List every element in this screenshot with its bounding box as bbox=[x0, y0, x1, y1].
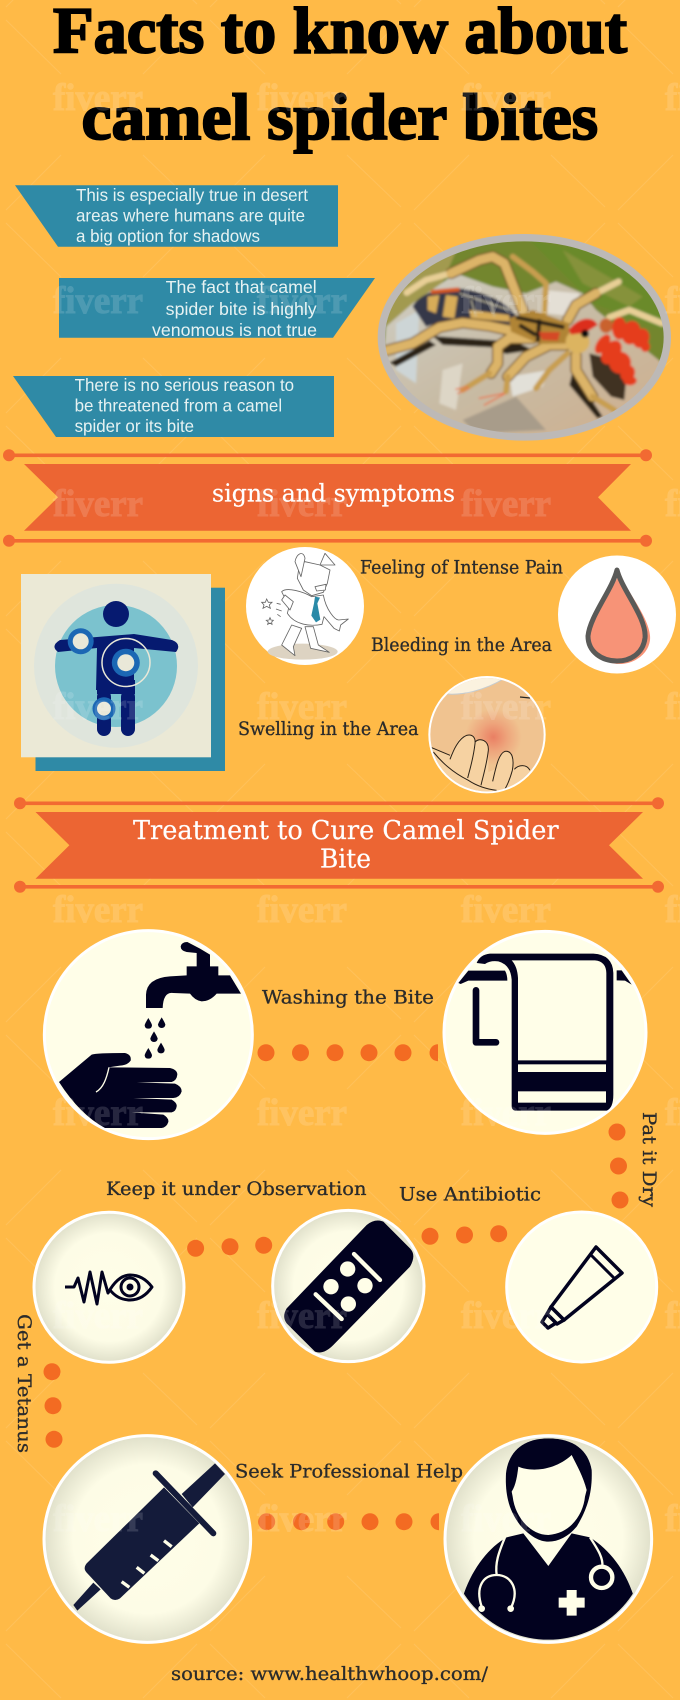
watermarks: fiverr bbox=[53, 483, 143, 525]
callout: no serious reason: There is no serious reason to bbox=[75, 375, 294, 395]
watermarks: fiverr bbox=[461, 280, 551, 322]
label: seek professional help: Seek Professional Help bbox=[235, 1462, 463, 1483]
watermarks bbox=[53, 77, 680, 1540]
label: swelling: Swelling in the Area bbox=[238, 719, 418, 740]
connector dots: towel to tube bbox=[608, 1124, 628, 1208]
connector dots: wash to towel bbox=[258, 1044, 438, 1061]
watermarks: fiverr bbox=[53, 1498, 143, 1540]
watermarks: fiverr bbox=[257, 280, 347, 322]
icon: man in pain bbox=[246, 547, 364, 665]
icon: doctor bbox=[445, 1436, 652, 1650]
icon: towel bbox=[444, 931, 646, 1133]
watermarks: fiverr bbox=[461, 686, 551, 728]
label: washing the bite: Washing the Bite bbox=[262, 987, 434, 1008]
watermarks: fiverr bbox=[257, 686, 347, 728]
callout: venom myth: The fact that camel bbox=[166, 277, 317, 297]
connector dots: bandage to tube bbox=[422, 1225, 507, 1245]
callout: no serious reason: spider or its bite bbox=[75, 416, 194, 436]
watermarks: fiverr bbox=[53, 1295, 143, 1337]
watermarks: fiverr bbox=[461, 1498, 551, 1540]
legs outline bbox=[386, 257, 596, 397]
watermarks: fiverr bbox=[257, 483, 347, 525]
banner: treatment bbox=[36, 812, 643, 879]
banner: signs and symptoms bbox=[24, 464, 631, 531]
label: use antibiotic: Use Antibiotic bbox=[399, 1185, 541, 1206]
label: get a tetanus: Get a Tetanus bbox=[13, 1314, 34, 1453]
connector dots: eye to syringe bbox=[44, 1363, 62, 1448]
chelicerae bbox=[592, 317, 652, 385]
title bbox=[53, 0, 627, 154]
watermarks: fiverr bbox=[461, 77, 551, 119]
divider line 1 bbox=[3, 449, 652, 461]
head bbox=[566, 330, 590, 353]
callout: desert shadows bbox=[15, 185, 338, 247]
watermarks: fiverr bbox=[461, 483, 551, 525]
watermarks: fiverr bbox=[53, 686, 143, 728]
divider line 4 bbox=[14, 881, 664, 893]
watermarks: fiverr bbox=[257, 77, 347, 119]
callout: no serious reason bbox=[13, 375, 334, 437]
watermarks: fiverr bbox=[53, 77, 143, 119]
thorax bbox=[509, 310, 569, 344]
banner: treatment: Treatment to Cure Camel Spider bbox=[133, 816, 559, 846]
icon: eye observation bbox=[34, 1212, 184, 1362]
divider line 3 bbox=[14, 797, 664, 809]
panel: body diagram bbox=[21, 574, 225, 771]
watermarks: fiverr bbox=[257, 1498, 347, 1540]
callout: desert shadows: areas where humans are quite bbox=[76, 206, 305, 226]
watermarks: fiverr bbox=[257, 1295, 347, 1337]
icon: swollen skin bbox=[428, 676, 546, 794]
callout: venom myth: spider bite is highly bbox=[166, 299, 317, 319]
banner: signs and symptoms: signs and symptoms bbox=[212, 480, 455, 508]
watermarks: fiverr bbox=[257, 1092, 347, 1134]
callout: venom myth: venomous is not true bbox=[152, 320, 317, 340]
label: pat it dry: Pat it Dry bbox=[638, 1112, 659, 1208]
abdomen bbox=[413, 288, 519, 327]
icon: bandage bbox=[273, 1210, 424, 1362]
watermarks: fiverr bbox=[53, 889, 143, 931]
watermarks: fiverr bbox=[53, 1092, 143, 1134]
connector dots: eye to bandage bbox=[187, 1237, 272, 1257]
connector dots: syringe to doctor bbox=[258, 1513, 439, 1530]
icon: blood drop bbox=[558, 556, 676, 674]
watermarks: fiverr bbox=[53, 280, 143, 322]
icon: washing hand under tap bbox=[44, 931, 252, 1139]
watermarks: fiverr bbox=[461, 1092, 551, 1134]
icon: ointment tube bbox=[507, 1212, 657, 1362]
label: keep under observation: Keep it under Observation bbox=[106, 1179, 367, 1200]
watermarks: fiverr bbox=[257, 889, 347, 931]
icon: syringe bbox=[44, 1436, 251, 1642]
watermarks: fiverr bbox=[461, 1295, 551, 1337]
callout: venom myth bbox=[59, 277, 375, 340]
watermarks: fiverr bbox=[461, 889, 551, 931]
label: intense pain: Feeling of Intense Pain bbox=[360, 557, 563, 578]
divider line 2 bbox=[3, 535, 652, 547]
callout: desert shadows: This is especially true in desert bbox=[76, 185, 308, 205]
callout: no serious reason: be threatened from a camel bbox=[75, 396, 282, 416]
title: camel spider bites bbox=[82, 81, 598, 154]
photo: camel spider bbox=[376, 230, 676, 445]
source line: source: www.healthwhoop.com/ bbox=[171, 1664, 489, 1685]
label: bleeding: Bleeding in the Area bbox=[371, 635, 552, 656]
banner: treatment: Bite bbox=[320, 845, 371, 875]
callout: desert shadows: a big option for shadows bbox=[76, 226, 260, 246]
